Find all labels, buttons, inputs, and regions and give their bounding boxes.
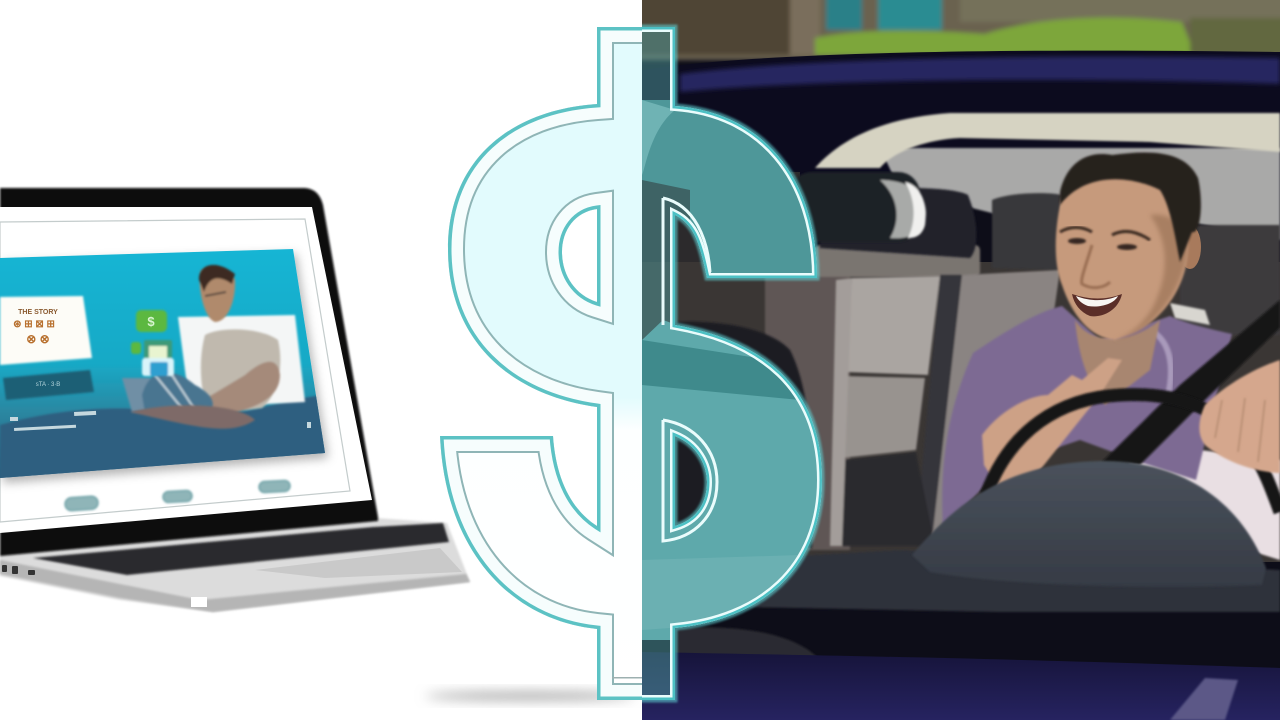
dashboard dome [912, 461, 1266, 587]
seat shape under dollar [675, 627, 818, 658]
car hood [642, 652, 1280, 720]
upper bowl fill [642, 100, 830, 285]
sun visor strip [815, 113, 1280, 168]
purple shirt [942, 306, 1232, 530]
eyes and brows [1060, 228, 1150, 240]
neck and chest [1075, 320, 1160, 405]
shirt shadows [1156, 331, 1173, 392]
near headrest [790, 172, 926, 242]
dollar sign [440, 27, 830, 700]
stem base tick [612, 677, 642, 678]
bright rim [440, 27, 822, 700]
translucent teal fill [440, 27, 822, 700]
dark button: sTA · 3·B [36, 382, 60, 388]
floor shadow under dollar sign [425, 692, 635, 700]
panel small controls [10, 411, 311, 431]
interior right of driver [1180, 225, 1280, 335]
car photo on right half [636, 0, 1280, 720]
steering wheel [986, 395, 1280, 512]
laptop ports [2, 565, 35, 575]
panel foreground skin sweep [130, 405, 255, 429]
hair [1060, 152, 1201, 262]
laptop keyboard [33, 523, 449, 575]
laptop screen [0, 207, 372, 533]
street background [636, 0, 1280, 60]
green dollar tile [136, 310, 167, 332]
rear window [880, 148, 1280, 240]
driver figure [942, 152, 1280, 560]
dark button [3, 370, 94, 400]
rear seat bench [642, 262, 1280, 562]
panel dark wave [0, 395, 330, 480]
rear seat left column [765, 268, 850, 550]
dashboard lower band [750, 550, 1280, 613]
right hand [1199, 360, 1280, 473]
white left background [0, 0, 642, 720]
rear headrest left [820, 188, 976, 258]
green dollar tile: $ [147, 314, 155, 329]
white undershirt [1130, 449, 1280, 562]
dollar left half [440, 27, 822, 700]
laptop bezel [0, 188, 378, 556]
seat behind dollar [642, 170, 800, 262]
hood highlight [1170, 678, 1238, 720]
screen inner frame [0, 219, 350, 522]
car roof and dark interior [678, 50, 1280, 96]
white collar behind [1170, 303, 1210, 325]
smile [1072, 294, 1122, 316]
dark interior base [642, 56, 1280, 668]
panel laptop and bag [122, 372, 213, 415]
laptop illustration [0, 188, 470, 612]
rear headrest right [992, 193, 1062, 270]
screen pill buttons [65, 480, 290, 511]
left white card: ⊛ ⊞ ⊠ ⊞ [13, 319, 55, 330]
laptop latch highlight [191, 597, 207, 607]
panel person [195, 265, 280, 420]
laptop base deck [0, 518, 470, 612]
right white card [178, 315, 305, 408]
inner white lines near holes [663, 198, 717, 541]
left white card [0, 296, 92, 365]
knuckle lines [1215, 398, 1265, 462]
app panel [0, 249, 330, 480]
left white card: ⊗ ⊗ [26, 332, 50, 346]
head [1056, 152, 1201, 340]
front seat shoulder [675, 322, 812, 548]
dollar right half [440, 27, 830, 700]
small app icons [131, 340, 174, 376]
rear seat upper band [815, 245, 980, 277]
left hand [982, 358, 1122, 490]
nose [1082, 245, 1110, 288]
seat panels [830, 270, 1060, 546]
seat belt [1102, 300, 1280, 465]
lower bowl fill [642, 320, 830, 640]
left white card: THE STORY [18, 309, 58, 316]
